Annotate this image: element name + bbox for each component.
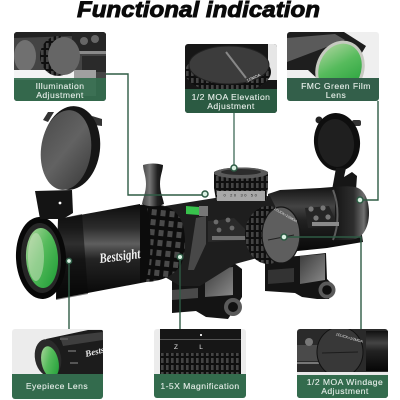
panel: elevation adjustment bbox=[185, 44, 277, 113]
label: elevation: 1/2 MOA Elevation bbox=[192, 92, 270, 102]
front mount screw bbox=[318, 282, 336, 298]
panel: FMC green film lens bbox=[287, 32, 379, 105]
label: film lens bbox=[287, 78, 379, 101]
label: eyepiece: Eyepiece Lens bbox=[26, 381, 88, 391]
label: elevation: Adjustment bbox=[207, 101, 255, 111]
callout line: windage bbox=[284, 237, 361, 330]
rifle scope bbox=[14, 164, 369, 319]
panel: magnification bbox=[154, 329, 246, 398]
panel: eyepiece lens bbox=[12, 329, 103, 399]
level bubble bbox=[186, 206, 199, 215]
callout line: film lens bbox=[360, 101, 378, 200]
label: elevation bbox=[185, 89, 277, 113]
rear mount screw bbox=[224, 298, 242, 316]
brand text: Bestsight bbox=[98, 247, 142, 267]
rear cap hinge bbox=[35, 190, 73, 219]
label: illumination bbox=[14, 78, 106, 101]
label: windage: 1/2 MOA Windage bbox=[307, 377, 383, 387]
tension knob bbox=[142, 164, 164, 206]
rear flip-up lens cap bbox=[36, 103, 105, 193]
objective tube bbox=[268, 186, 363, 254]
scale numerals: Z bbox=[174, 344, 178, 351]
label: windage: Adjustment bbox=[321, 386, 369, 396]
label: film lens: FMC Green Film bbox=[301, 81, 371, 91]
eyepiece body bbox=[56, 204, 146, 299]
label: windage bbox=[297, 375, 388, 398]
windage dial marking: 1CLICK=1/2MOA bbox=[273, 207, 299, 224]
label: illumination: Illumination bbox=[36, 81, 84, 91]
label: magnification: 1-5X Magnification bbox=[160, 381, 240, 391]
brand on eyepiece: Bestsight bbox=[83, 341, 120, 359]
elevation scale: 0 20 30 50 bbox=[224, 192, 258, 198]
centre body bbox=[160, 196, 280, 286]
objective rail bbox=[305, 206, 338, 228]
eyepiece lens bbox=[14, 216, 68, 300]
windage dial bbox=[262, 207, 300, 263]
callout line: magnification bbox=[179, 257, 181, 329]
windage knurled ring bbox=[245, 206, 291, 264]
dial marking: 1CLICK=1/2MOA bbox=[335, 332, 364, 344]
panel: illumination adjustment bbox=[14, 32, 106, 101]
panel: windage adjustment bbox=[297, 327, 388, 398]
front flip-up lens cap bbox=[311, 111, 363, 190]
callout line: elevation bbox=[233, 113, 235, 168]
label: illumination: Adjustment bbox=[36, 90, 84, 100]
magnification ring bbox=[143, 204, 185, 282]
panel: magnification: L bbox=[199, 344, 203, 351]
elevation turret bbox=[214, 168, 268, 200]
rear mount bbox=[172, 263, 242, 319]
callout dots bbox=[66, 165, 363, 264]
label: film lens: Lens bbox=[326, 90, 346, 100]
callout line: illumination bbox=[106, 74, 205, 195]
callout line: eyepiece bbox=[68, 261, 70, 329]
dial marking: 1/2MOA bbox=[246, 72, 261, 83]
front mount bbox=[265, 253, 335, 299]
